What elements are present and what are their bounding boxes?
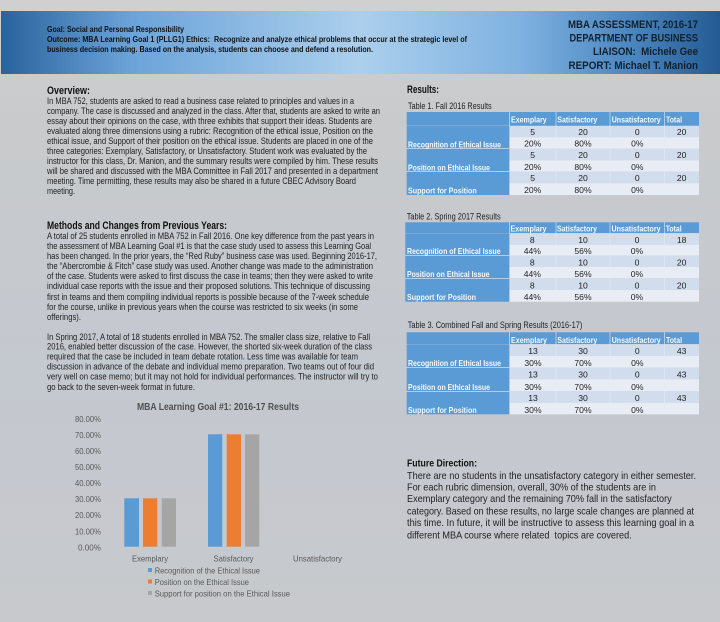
results heading: Results: <box>407 84 439 96</box>
chart legend: Recognition of the Ethical Issue <box>155 566 260 576</box>
table 3 values: 30 <box>578 346 588 356</box>
table 1 values: 20% <box>524 162 542 172</box>
table 1 column headers: Exemplary <box>511 116 547 124</box>
table 2 values: 0 <box>635 258 640 268</box>
table 3 values: 30 <box>578 370 588 380</box>
overview body text: essay about their opinions on the case, with three exhibits that support their ideas. Students are <box>47 116 372 126</box>
future direction body text: For each rubric dimension, overall, 30% of the students are in <box>407 482 656 494</box>
table 3 values: 13 <box>528 393 538 403</box>
table 2 column headers <box>510 224 682 234</box>
table 3 values: 30% <box>524 382 542 392</box>
future direction body text <box>407 471 696 542</box>
table 2 column headers: Satisfactory <box>557 224 597 234</box>
table 3 row labels: Position on Ethical Issue <box>408 382 490 392</box>
category labels: Exemplary <box>132 554 169 564</box>
table 1 values: 20 <box>578 150 588 160</box>
table 1 values: 0 <box>635 150 640 160</box>
y axis labels: 80.00% <box>75 414 101 424</box>
table 1 row labels: Position on Ethical Issue <box>408 162 490 172</box>
report details <box>568 19 698 72</box>
table 1 values: 20 <box>578 127 588 137</box>
y axis labels: 0.00% <box>78 542 101 552</box>
methods body text: first in teams and them compiling individual reports is possible because of the 7-week schedule <box>47 292 369 302</box>
table 3 values: 70% <box>574 382 592 392</box>
table 2 row labels: Position on Ethical Issue <box>407 269 490 279</box>
category labels <box>132 554 343 564</box>
methods section <box>47 220 378 392</box>
table 1 values: 0% <box>631 185 644 195</box>
table 3 values: 30% <box>524 358 542 368</box>
chart title: MBA Learning Goal #1: 2016-17 Results <box>137 402 299 413</box>
table 2 row labels <box>407 246 501 302</box>
table 2 column headers: Unsatisfactory <box>612 224 661 234</box>
table 3 caption: Table 3. Combined Fall and Spring Results (2016-17) <box>408 320 582 330</box>
header band <box>1 11 720 74</box>
overview body text: In MBA 752, students are asked to read a business case related to principles and values in a <box>47 96 354 106</box>
y axis labels: 30.00% <box>75 494 101 504</box>
table 2 column headers: Total <box>666 224 682 234</box>
chart legend: Position on the Ethical Issue <box>155 577 249 587</box>
future direction body text: Exemplary category and the remaining 70% fall in the satisfactory <box>407 494 673 505</box>
chart legend: Support for position on the Ethical Issue <box>155 588 290 598</box>
overview body text: evaluated along three dimensions using a rubric: Recognition of the ethical issue, Position on the <box>47 126 373 136</box>
future direction heading: Future Direction: <box>407 458 477 470</box>
table 3 row labels <box>408 358 501 415</box>
table 3 values: 70% <box>574 358 592 368</box>
table 2 values <box>524 235 687 302</box>
table 2 values: 44% <box>524 292 541 302</box>
table 1 values: 0% <box>631 138 644 148</box>
methods heading: Methods and Changes from Previous Years: <box>47 220 227 232</box>
table 1 values: 0 <box>635 127 640 137</box>
methods body text: very well on case memo; but it may not hold for individual performances. The instructor will try to <box>47 372 378 382</box>
future direction body text: There are no students in the unsatisfactory category in either semester. <box>407 471 696 482</box>
table 2: Spring 2017 <box>405 212 699 302</box>
overview body text: will be shared and discussed with the MBA Committee in Fall 2017 and presented in a department <box>46 166 378 176</box>
table 2 values: 44% <box>524 246 541 256</box>
table 3 values: 0% <box>631 405 644 415</box>
table 2 caption: Table 2. Spring 2017 Results <box>407 212 501 222</box>
table 3 values: 13 <box>528 370 538 380</box>
overview body text: company. The case is discussed and analyzed in the class. After that, students are asked to write an <box>47 106 380 116</box>
table 3 values: 30 <box>578 393 588 403</box>
table 2 values: 10 <box>578 258 588 268</box>
methods body text: discussion in advance of the debate and individual memo preparation. Two teams out of four did <box>47 362 374 372</box>
table 2 values: 0% <box>631 269 644 279</box>
table 2 values: 0% <box>631 246 644 256</box>
table 2 values: 10 <box>578 280 588 290</box>
y axis labels: 70.00% <box>75 430 101 440</box>
methods body text: A total of 25 students enrolled in MBA 752 in Fall 2016. One key difference from the past years in <box>47 231 374 241</box>
table 3: combined results <box>407 320 699 415</box>
methods body text: go back to the seven-week format in future. <box>47 382 195 392</box>
bars: exemplary <box>124 498 176 547</box>
table 3 column headers <box>511 336 682 345</box>
table 2 row labels: Recognition of Ethical Issue <box>407 246 501 256</box>
report details: REPORT: Michael T. Manion <box>568 60 698 72</box>
table 3 values: 70% <box>574 405 592 415</box>
table 1 values: 20 <box>578 173 588 183</box>
table 1 values <box>524 127 687 195</box>
goal and outcome text: Outcome: MBA Learning Goal 1 (PLLG1) Ethics: Recognize and analyze ethical problems that occur at the strategic level of <box>47 34 467 44</box>
table 3 column headers: Unsatisfactory <box>612 336 661 345</box>
methods body text <box>47 231 378 392</box>
table 1 values: 0% <box>631 162 644 172</box>
chart legend <box>148 566 290 598</box>
table 2 values: 18 <box>677 235 687 245</box>
table 1 column headers: Unsatisfactory <box>612 116 661 124</box>
table 2 values: 0 <box>635 235 640 245</box>
table 3 column headers: Total <box>666 336 682 345</box>
overview heading: Overview: <box>47 85 90 97</box>
table 3 values <box>524 346 687 415</box>
table 1 values: 20 <box>677 127 687 137</box>
table 2 values: 56% <box>574 269 592 279</box>
table 1 row labels: Recognition of Ethical Issue <box>408 140 501 150</box>
table 2 values: 8 <box>530 280 535 290</box>
y axis labels: 10.00% <box>75 526 101 536</box>
overview section <box>46 85 380 196</box>
table 2 values: 10 <box>578 235 588 245</box>
table 3 values: 30% <box>524 405 542 415</box>
goal and outcome text <box>47 24 467 54</box>
table 2 values: 8 <box>530 258 535 268</box>
table 2 values: 8 <box>530 235 535 245</box>
category labels: Unsatisfactory <box>293 554 343 564</box>
table 3 row labels: Recognition of Ethical Issue <box>408 358 501 368</box>
table 1 column headers: Satisfactory <box>557 116 598 124</box>
overview body text: ethical issue, and Support of their position on the ethical issue. Students are placed in one of the <box>47 136 373 146</box>
table 3 values: 13 <box>528 346 538 356</box>
y axis labels: 60.00% <box>75 446 101 456</box>
table 2 values: 0 <box>635 280 640 290</box>
table 1 values: 20% <box>524 185 542 195</box>
table 1 column headers: Total <box>666 116 682 124</box>
methods body text: of the case. Students were asked to first discuss the case in teams; then they were asked to write <box>47 271 373 281</box>
table 1 values: 5 <box>530 127 535 137</box>
table 2 values: 20 <box>677 258 687 268</box>
table 2 column headers: Exemplary <box>510 224 547 234</box>
table 1 values: 5 <box>530 173 535 183</box>
table 1 row labels: Support for Position <box>408 186 477 196</box>
table 1 values: 20 <box>677 150 687 160</box>
table 3 column headers: Exemplary <box>511 336 547 345</box>
table 3 row labels: Support for Position <box>408 405 477 415</box>
overview body text: instructor for this class, Dr. Manion, and the summary results were compiled by him. These results <box>47 156 378 166</box>
methods body text: individual case reports with the issue and their proposed solutions. This technique of discussing <box>47 281 370 291</box>
overview body text: three categories: Exemplary, Satisfactory, or Unsatisfactory. Student work was evaluated by the <box>47 146 367 156</box>
table 1 values: 20% <box>524 138 542 148</box>
table 3 values: 43 <box>677 393 687 403</box>
table 1 column headers <box>511 116 682 124</box>
overview body text <box>46 96 380 196</box>
future direction body text: different MBA course where related topics are covered. <box>407 530 632 542</box>
methods body text: In Spring 2017, A total of 18 students enrolled in MBA 752. The smaller class size, relative to Fall <box>47 332 370 342</box>
methods body text: the assessment of MBA Learning Goal #1 is that the case study used to assess this Learning Goal <box>47 241 371 251</box>
table 1 values: 20 <box>677 173 687 183</box>
table 2 values: 56% <box>574 292 592 302</box>
goal and outcome text: Goal: Social and Personal Responsibility <box>47 24 184 34</box>
table 1 values: 80% <box>574 162 592 172</box>
overview body text: meeting. <box>47 186 75 196</box>
goal and outcome text: business decision making. Based on the analysis, students can choose and defend a resolution. <box>47 44 373 54</box>
y axis labels: 20.00% <box>75 510 101 520</box>
table 3 values: 0% <box>631 358 644 368</box>
table 2 values: 56% <box>574 246 592 256</box>
table 3 values: 0 <box>635 393 640 403</box>
report details: LIAISON: Michele Gee <box>593 46 698 58</box>
y axis labels <box>75 414 101 552</box>
table 1 values: 5 <box>530 150 535 160</box>
methods body text: the “Abercrombie & Fitch” case study was used. Another change was made to the administration <box>47 261 373 271</box>
future direction section <box>407 458 696 542</box>
bar chart: MBA Learning Goal #1 results <box>75 402 343 598</box>
table 1 row labels <box>408 140 501 196</box>
table 2 values: 20 <box>677 280 687 290</box>
future direction body text: this time. In future, it will be instructive to assess this learning goal in a <box>407 518 694 529</box>
table 3 values: 0% <box>631 382 644 392</box>
table 1 values: 0 <box>635 173 640 183</box>
table 1 caption: Table 1. Fall 2016 Results <box>408 101 492 111</box>
table 2 values: 44% <box>524 269 541 279</box>
methods body text: for the course, unlike in previous years when the course was restricted to six weeks (in some <box>47 302 358 312</box>
bars: satisfactory <box>208 434 259 547</box>
y axis labels: 40.00% <box>75 478 101 488</box>
table 2 row labels: Support for Position <box>407 292 476 302</box>
table 1 values: 80% <box>574 185 592 195</box>
methods body text: has been changed. In the prior years, the “Red Ruby” business case was used. Beginning 2016-17, <box>47 251 377 261</box>
methods body text: offerings). <box>47 312 81 322</box>
table 1 values: 80% <box>574 138 592 148</box>
report details: MBA ASSESSMENT, 2016-17 <box>568 19 698 31</box>
methods body text: required that the case be included in team debate rotation. Less time was available for team <box>47 352 358 362</box>
table 2 values: 0% <box>631 292 644 302</box>
table 3 values: 0 <box>635 346 640 356</box>
category labels: Satisfactory <box>214 554 254 564</box>
table 3 column headers: Satisfactory <box>557 336 598 345</box>
table 3 values: 0 <box>635 370 640 380</box>
methods body text: 2016, enabled better discussion of the case. However, the shorted six-week duration of the class <box>47 342 372 352</box>
table 3 values: 43 <box>677 370 687 380</box>
table 1: Fall 2016 <box>407 101 699 196</box>
overview body text: meeting. Time permitting, these results may also be shared in a future CBEC Advisory Board <box>47 176 356 186</box>
table 3 values: 43 <box>677 346 687 356</box>
y axis labels: 50.00% <box>75 462 101 472</box>
